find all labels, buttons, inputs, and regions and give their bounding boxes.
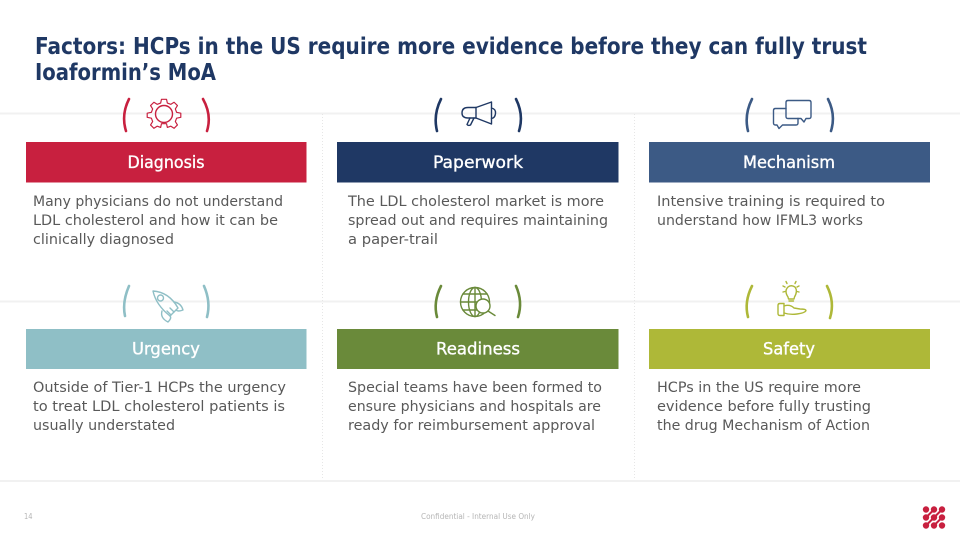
panel: Urgency: [26, 286, 306, 434]
header: Diagnosis: [26, 142, 306, 182]
icon: megaphone in parentheses: [436, 99, 521, 131]
header: Urgency: Urgency: [132, 340, 200, 358]
text: Readiness: [348, 380, 602, 434]
text: Diagnosis: LDL cholesterol and how it can be: [33, 213, 278, 229]
text: Urgency: [33, 380, 286, 434]
text: Safety: HCPs in the US require more: [657, 380, 861, 396]
title: Ioaformin’s MoA: [35, 60, 216, 86]
icon: light bulb over hand in parentheses: [747, 282, 832, 318]
text: Readiness: ready for reimbursement approval: [348, 418, 595, 434]
text: Paperwork: a paper-trail: [348, 232, 438, 248]
icon: speech bubbles in parentheses: [747, 99, 833, 131]
footer confidentiality note: Confidential - Internal Use Only: [421, 512, 535, 521]
icon: company logo: [923, 506, 945, 529]
text: Mechanism: understand how IFML3 works: [657, 213, 863, 229]
panel: Readiness: [337, 286, 618, 434]
text: Safety: the drug Mechanism of Action: [657, 418, 870, 434]
text: Paperwork: [347, 194, 608, 248]
text: Urgency: Outside of Tier-1 HCPs the urgency: [33, 380, 286, 396]
panel: Diagnosis: [26, 99, 306, 248]
text: Urgency: to treat LDL cholesterol patients is: [33, 399, 285, 415]
header: Mechanism: [649, 142, 930, 182]
page number: 14: [24, 512, 32, 521]
text: Readiness: ensure physicians and hospitals are: [348, 399, 601, 415]
header: Diagnosis: Diagnosis: [128, 153, 204, 172]
icon: gear in parentheses: [124, 99, 209, 131]
text: Diagnosis: clinically diagnosed: [33, 232, 174, 248]
header: Safety: Safety: [763, 340, 815, 358]
text: Urgency: usually understated: [33, 418, 175, 434]
text: Safety: [657, 380, 871, 434]
panel: Paperwork: [337, 99, 618, 248]
icon: rocket in parentheses: [124, 286, 208, 322]
text: Paperwork: spread out and requires maintaining: [348, 213, 608, 229]
text: Diagnosis: [33, 194, 283, 248]
header: Mechanism: Mechanism: [743, 153, 835, 172]
text: Mechanism: [657, 194, 885, 229]
header: Urgency: [26, 329, 306, 369]
panel: Safety: [649, 282, 930, 434]
text: Safety: evidence before fully trusting: [657, 399, 871, 415]
icon: globe with magnifier in parentheses: [436, 286, 520, 317]
header: Safety: [649, 329, 930, 369]
title: [35, 34, 867, 86]
text: Paperwork: The LDL cholesterol market is more: [347, 194, 604, 210]
header: Readiness: [337, 329, 618, 369]
header: Paperwork: [337, 142, 618, 182]
text: Diagnosis: Many physicians do not understand: [33, 194, 283, 210]
panel: Mechanism: [649, 99, 930, 229]
header: Paperwork: Paperwork: [433, 153, 523, 172]
text: Readiness: Special teams have been formed to: [348, 380, 602, 396]
text: Mechanism: Intensive training is required to: [657, 194, 885, 210]
header: Readiness: Readiness: [436, 340, 520, 358]
